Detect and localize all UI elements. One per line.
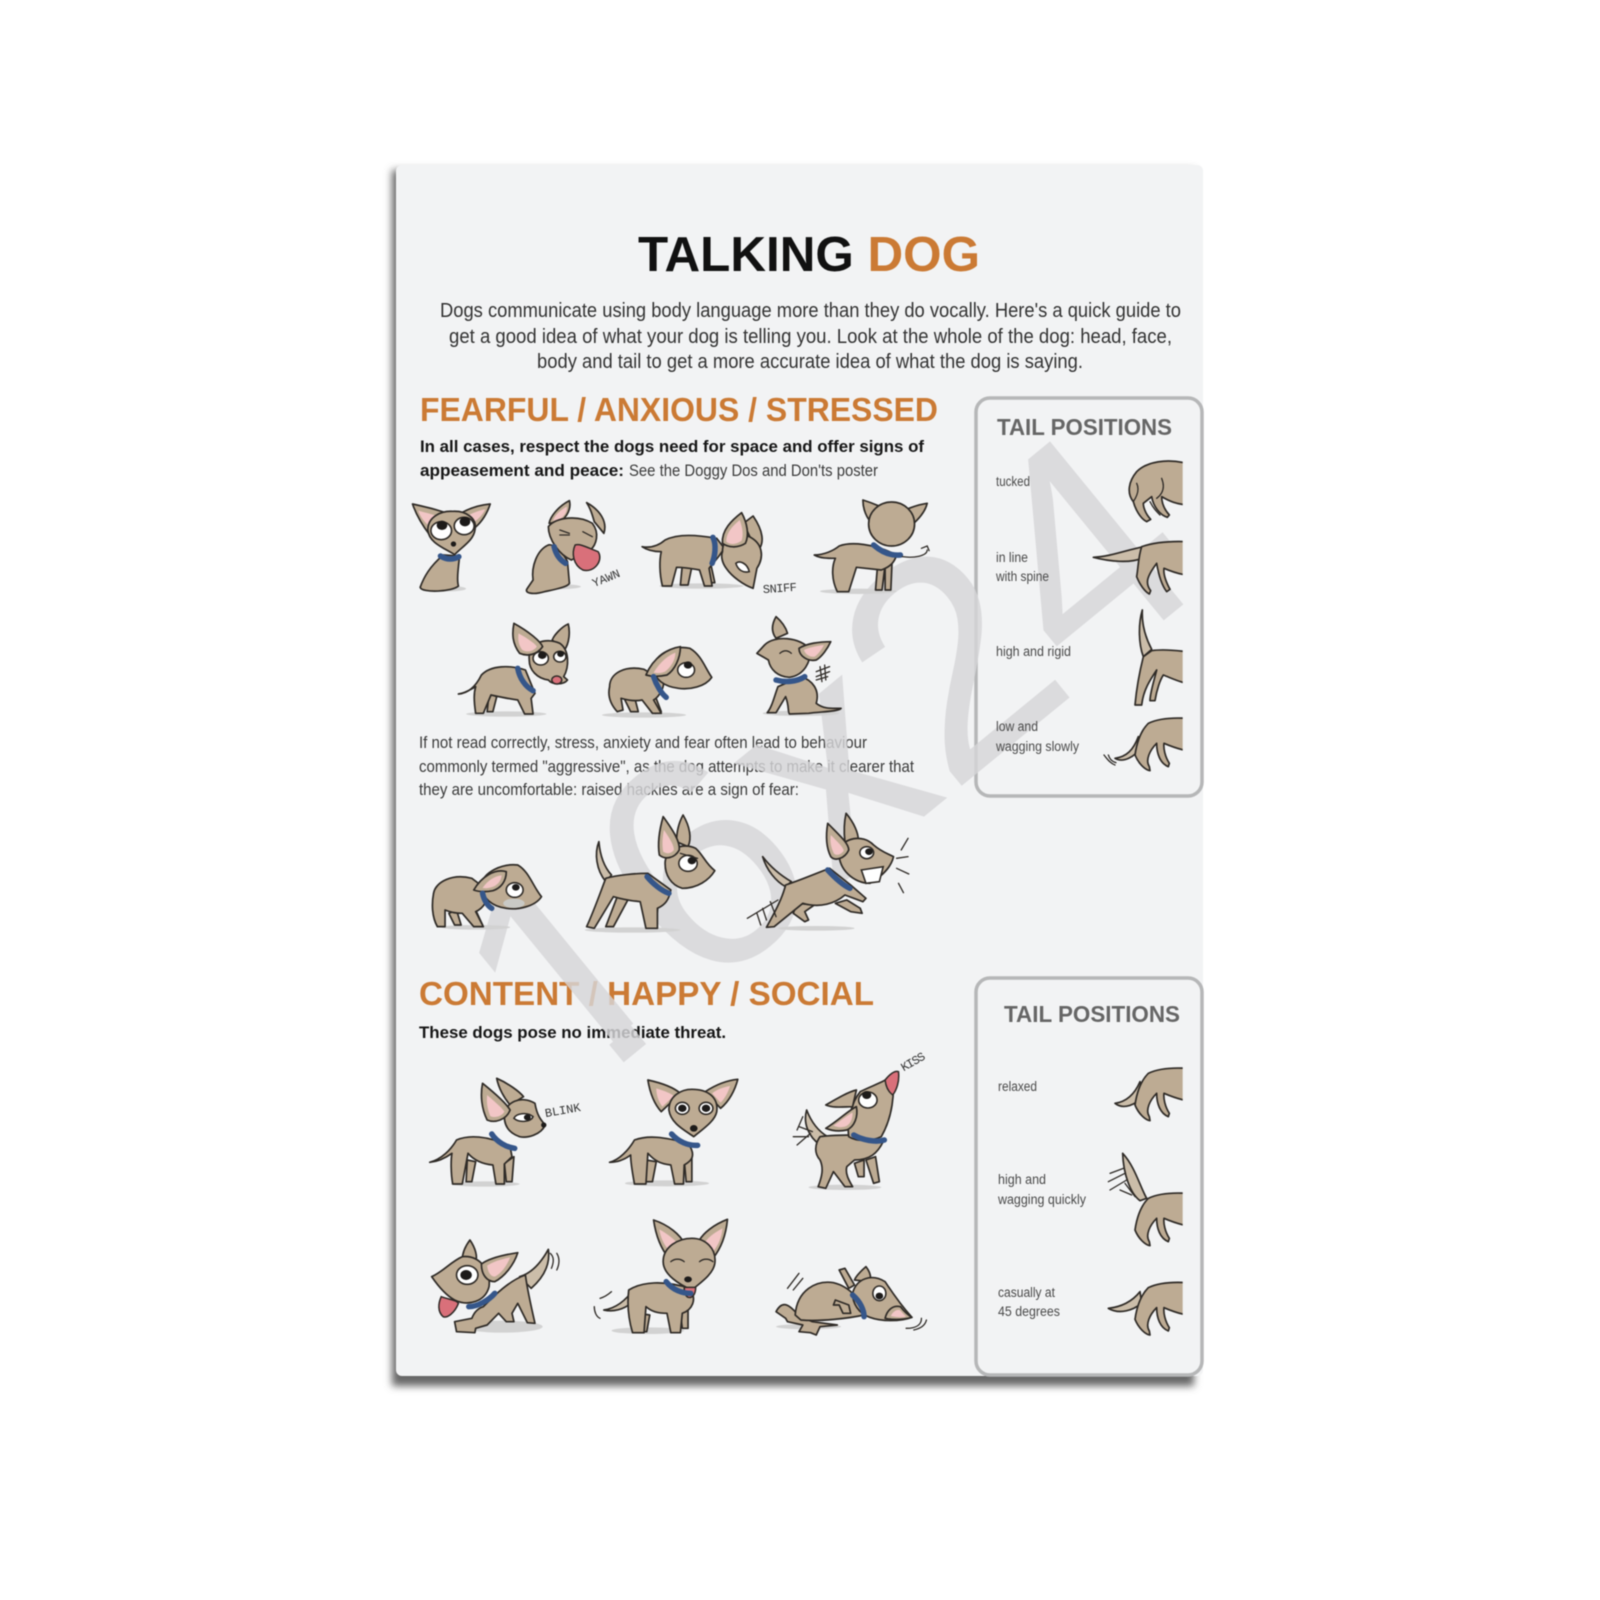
icon: tail tucked: [1129, 461, 1187, 522]
aggression text: If not read correctly, stress, anxiety and fear often lead to behaviour: [419, 733, 867, 752]
icon: tail low wagging: [1104, 718, 1187, 771]
aggression text: [419, 733, 914, 799]
dog: cowering: [602, 647, 712, 718]
dog: sniffing: [642, 513, 762, 589]
poster shadow: [392, 170, 1194, 1386]
dog: licking lips: [458, 623, 569, 717]
dog: happy closed eyes: [594, 1219, 727, 1334]
threat note: These dogs pose no immediate threat.: [419, 1023, 726, 1042]
label casual: [998, 1285, 1060, 1319]
dog: sitting looking up: [413, 504, 490, 592]
icon: tail in line: [1093, 542, 1187, 594]
dog: alert front: [610, 1079, 738, 1186]
icon: tail high rigid: [1135, 610, 1187, 705]
icon: tail relaxed: [1115, 1068, 1187, 1121]
intro text: [440, 300, 1181, 373]
dog: yawning: [526, 501, 605, 593]
dog: lunging snarl: [747, 813, 909, 931]
watermark: 16x24: [393, 366, 1254, 1158]
dogs: happy group: [430, 1071, 926, 1335]
label in line: [995, 550, 1049, 584]
dog: scratching: [757, 617, 841, 716]
panel title: TAIL POSITIONS: [1004, 1001, 1180, 1027]
advice text: [420, 437, 924, 480]
dog: rolling: [776, 1267, 926, 1335]
label high rigid: high and rigid: [996, 644, 1071, 659]
icon: tail casual 45: [1108, 1282, 1187, 1335]
panel: tail labels fearful: [995, 414, 1172, 754]
label tucked: tucked: [996, 474, 1030, 489]
advice text: In all cases, respect the dogs need for space and offer signs of: [420, 437, 924, 456]
dogs: fearful group: [413, 500, 929, 933]
hand lettering: kiss: KISS: [899, 1050, 928, 1075]
label high wagging: [997, 1172, 1086, 1207]
label low wagging: wagging slowly: [995, 739, 1079, 754]
label high wagging: wagging quickly: [997, 1192, 1086, 1207]
label in line: in line: [996, 550, 1028, 565]
aggression text: commonly termed "aggressive", as the dog attempts to make it clearer that: [419, 757, 914, 776]
aggression text: they are uncomfortable: raised hackles are a sign of fear:: [419, 780, 799, 799]
intro text: body and tail to get a more accurate idea of what the dog is saying.: [537, 351, 1083, 373]
label high wagging: high and: [998, 1172, 1046, 1187]
label casual: casually at: [998, 1285, 1055, 1300]
panel: tail labels content: [997, 1001, 1180, 1319]
dog: blinking: [430, 1078, 546, 1187]
label casual: 45 degrees: [998, 1304, 1060, 1319]
panel title: TAIL POSITIONS: [997, 414, 1172, 440]
dog: back view: [814, 500, 929, 594]
hand lettering: yawn: YAWN: [590, 567, 622, 591]
dog: play bow: [432, 1240, 559, 1333]
dog: standing stiff: [585, 815, 715, 933]
advice text: appeasement and peace:: [420, 461, 624, 480]
hand lettering: blink: BLINK: [544, 1101, 583, 1121]
dog: hackles cowering: [432, 865, 541, 930]
hand lettering: sniff: SNIFF: [762, 581, 797, 597]
intro text: Dogs communicate using body language more than they do vocally. Here's a quick guide to: [440, 300, 1181, 322]
label low wagging: [995, 719, 1079, 754]
panel: tail positions fearful frame: [976, 398, 1202, 796]
label in line: with spine: [995, 569, 1049, 584]
label relaxed: relaxed: [998, 1079, 1037, 1094]
dog: kissing: [793, 1071, 899, 1190]
icon: tail high wagging: [1108, 1153, 1187, 1246]
heading: fearful: FEARFUL / ANXIOUS / STRESSED: [420, 391, 938, 428]
advice text: See the Doggy Dos and Don'ts poster: [629, 461, 878, 480]
heading: content: CONTENT / HAPPY / SOCIAL: [419, 975, 874, 1012]
panel: tail icons fearful: [1093, 461, 1187, 771]
intro text: get a good idea of what your dog is telling you. Look at the whole of the dog: head, face,: [449, 326, 1172, 348]
label low wagging: low and: [996, 719, 1038, 734]
title: TALKING DOG: [638, 228, 980, 282]
panel: tail positions content frame: [976, 978, 1202, 1375]
poster sheet: [396, 165, 1203, 1376]
panel: tail icons content: [1108, 1068, 1187, 1335]
